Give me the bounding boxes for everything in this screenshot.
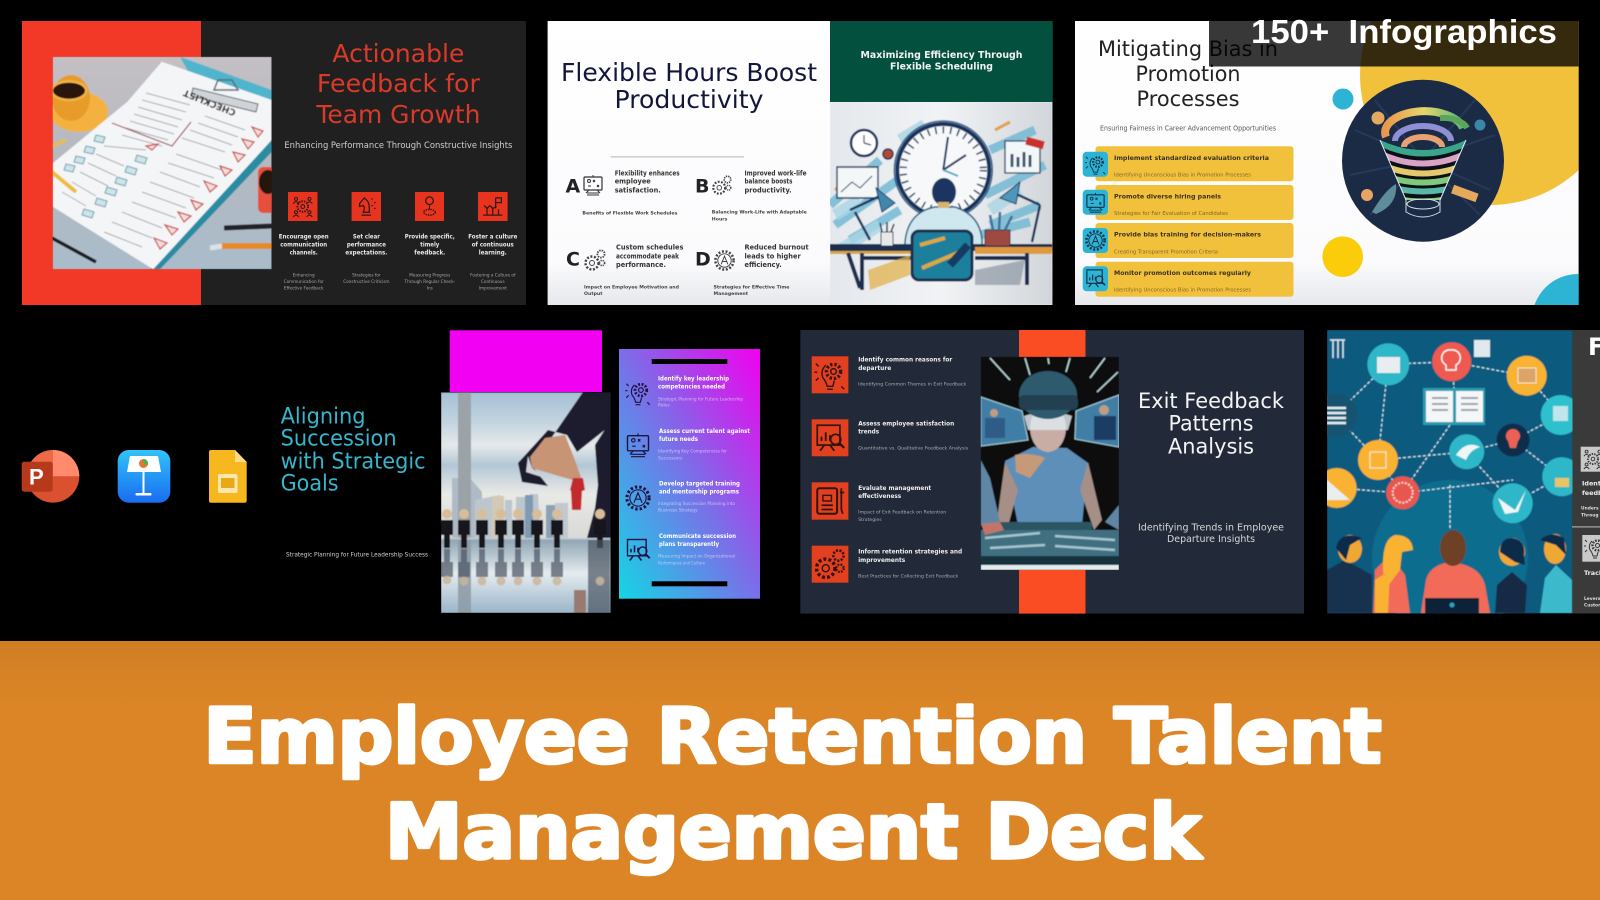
item C: accommodate peak (616, 253, 680, 261)
list subtext: Integrating Succession Planning into (658, 501, 735, 507)
exit item headings: Identify common reasons for (858, 357, 953, 364)
subtitle: Enhancing Performance Through Constructive Insights (284, 141, 513, 151)
list text (658, 376, 750, 548)
list text: Assess current talent against (659, 428, 750, 435)
text: four feedback actions: Encourage open (279, 235, 329, 241)
text: four feedback subtitles: Continuous (481, 279, 505, 284)
list text: and mentorship programs (659, 488, 739, 495)
heading: aligning succession: Aligning (281, 403, 366, 429)
item B (695, 169, 807, 222)
item D: efficiency. (744, 261, 782, 269)
subtitle: Ensuring Fairness in Career Advancement Opportunities (1100, 125, 1276, 133)
text: four feedback actions: performance (347, 243, 386, 249)
item B: productivity. (744, 186, 792, 194)
heading: flexible hours (561, 58, 817, 114)
image: leader picking figure (441, 392, 611, 613)
heading: actionable feedback (315, 39, 481, 129)
overlay banner: 150+ infographics: 150+ Infographics (1251, 13, 1557, 50)
item B: balance boosts (744, 178, 793, 186)
text: four feedback actions: timely (420, 243, 440, 249)
people around laptop (1327, 530, 1572, 614)
list item: monitor outcomes: Monitor promotion outcomes regularly (1114, 269, 1252, 277)
icon: flag team (478, 192, 508, 221)
list text: competencies needed (658, 384, 725, 391)
magenta block (450, 330, 602, 392)
item D: D (695, 249, 711, 271)
exit item subtext: Identifying Common Themes in Exit Feedback (858, 381, 967, 387)
exit item subtext: Impact of Exit Feedback on Retention (858, 509, 946, 515)
text: four feedback subtitles: Ins (427, 286, 433, 291)
heading: actionable feedback: Feedback for (317, 69, 481, 98)
list subtext: Identifying Key Competencies for (658, 449, 727, 455)
exit item headings: Inform retention strategies and (858, 549, 962, 556)
list text: plans transparently (659, 541, 719, 548)
heading: aligning succession: Succession (281, 426, 397, 452)
text: four feedback actions: learning. (479, 251, 507, 257)
panel: exit feedback slide (800, 330, 1304, 614)
list item: bias training: Creating Transparent Promotion Criteria (1114, 249, 1218, 255)
green header text: Maximizing Efficiency Through (860, 50, 1023, 61)
list item: monitor outcomes (1083, 262, 1294, 297)
image: clock and worker illustration (830, 102, 1052, 305)
green header text (860, 50, 1023, 73)
title: Employee Retention Talent (204, 692, 1382, 781)
clipped next-slide strip: Custor (1584, 603, 1600, 609)
list item: evaluation criteria: Implement standardized evaluation criteria (1114, 154, 1269, 162)
text: four feedback actions: feedback. (414, 251, 445, 257)
list subtext: Measuring Impact on Organizational (658, 554, 735, 560)
heading: exit feedback (1138, 389, 1285, 459)
text: four feedback subtitles: Effective Feedback (284, 286, 324, 291)
icon: Google Slides (209, 450, 247, 503)
text: four feedback actions: expectations. (345, 251, 387, 257)
decorative circles (1322, 21, 1579, 305)
text: four feedback subtitles: Constructive Criticism (343, 279, 389, 284)
list item: bias training (1083, 223, 1294, 258)
item A: A (566, 176, 580, 198)
title (204, 692, 1382, 876)
divider (611, 156, 744, 157)
exit item subtext: Strategies (858, 517, 882, 523)
banner: deck title (0, 641, 1600, 900)
heading: actionable feedback: Actionable (332, 39, 464, 68)
item B: B (695, 176, 709, 198)
heading: aligning succession (281, 403, 426, 497)
panel: flexible hours slide (548, 21, 1052, 305)
item D: Management (714, 291, 749, 297)
item C: Impact on Employee Motivation and (584, 284, 679, 290)
exit item subtext: Quantitative vs. Qualitative Feedback Analysis (858, 445, 969, 451)
icon: Keynote (118, 450, 170, 503)
item C: Output (584, 291, 603, 297)
exit item headings: Evaluate management (858, 485, 931, 492)
heading: flexible hours: Flexible Hours Boost (561, 58, 817, 87)
icon: PowerPoint: P (29, 464, 44, 490)
item A: Flexibility enhances (615, 169, 680, 177)
green header text: Flexible Scheduling (890, 62, 993, 73)
list item: hiring panels: Strategies for Fair Evaluation of Candidates (1114, 211, 1228, 217)
exit item headings (858, 357, 962, 564)
item A: employee (615, 178, 651, 186)
heading: aligning succession: with Strategic (281, 448, 426, 474)
item C: Custom schedules (616, 244, 683, 252)
icon: chess knight (352, 192, 381, 221)
panel: mitigating bias slide (1075, 19, 1579, 305)
item B: Improved work-life (744, 169, 807, 177)
list item: monitor outcomes: Identifying Unconscious Bias in Promotion Processes (1114, 288, 1251, 294)
title: Management Deck (385, 787, 1202, 876)
text: four feedback actions: of continuous (472, 243, 514, 249)
exit item subtext: Best Practices for Collecting Exit Feedback (858, 573, 959, 579)
list subtext: Strategic Planning for Future Leadership (658, 396, 743, 402)
text: four feedback subtitles: Strategies for (352, 272, 381, 277)
item D: leads to higher (744, 253, 801, 261)
item B: Balancing Work-Life with Adaptable (712, 210, 807, 216)
exit item headings: effectiveness (858, 493, 901, 500)
text: four feedback subtitles: Enhancing (293, 272, 315, 277)
exit item subtext (858, 381, 969, 579)
clipped next-slide strip: Throug (1581, 513, 1599, 519)
item A: Benefits of Flexible Work Schedules (582, 210, 678, 216)
item D: Strategies for Effective Time (714, 284, 790, 290)
item D: Reduced burnout (744, 244, 809, 252)
row of figurines (441, 520, 606, 548)
exit item headings: improvements (858, 557, 905, 564)
list subtext: Successors (658, 455, 683, 461)
heading: exit feedback: Patterns (1168, 412, 1254, 437)
clipped next-slide strip (1572, 333, 1600, 609)
text: four feedback actions: Foster a culture (468, 235, 517, 241)
heading: exit feedback: Exit Feedback (1138, 389, 1285, 414)
list text: future needs (659, 436, 698, 443)
item C: performance. (616, 261, 666, 269)
text: four feedback actions: Provide specific, (405, 235, 455, 241)
text: four feedback subtitles: Measuring Progress (409, 272, 450, 277)
icon: team target (288, 192, 318, 221)
text: four feedback subtitles: Fostering a Culture of (470, 272, 516, 277)
subtitle: exit feedback (1138, 523, 1284, 545)
text: four feedback actions: communication (280, 243, 327, 249)
list item: bias training: Provide bias training for decision-makers (1114, 231, 1261, 239)
item B: Hours (712, 216, 728, 222)
text: four feedback actions (279, 235, 517, 257)
text: four feedback actions: channels. (290, 251, 318, 257)
exit item headings: trends (858, 429, 879, 436)
panel: knowledge network illustration (1327, 330, 1600, 614)
image: rainbow funnel (1342, 80, 1504, 242)
panel: succession gradient list (619, 349, 760, 599)
image: checklist on clipboard (50, 57, 278, 269)
list item: evaluation criteria (1083, 146, 1294, 181)
text: four feedback subtitles: Through Regular Check- (404, 279, 456, 284)
item D (695, 244, 809, 297)
image: woman with holographic visor (981, 357, 1119, 570)
subtitle: strategic planning: Strategic Planning for Future Leadership Success (286, 551, 429, 559)
heading: exit feedback: Analysis (1168, 434, 1254, 459)
clipped next-slide strip: Unders (1581, 505, 1599, 511)
heading: aligning succession: Goals (281, 471, 339, 497)
exit item headings: Assess employee satisfaction (858, 420, 954, 427)
exit item headings: departure (858, 365, 891, 372)
panel: actionable feedback slide (22, 21, 526, 305)
text: upside-down checklist heading: CHECKLIST (182, 86, 238, 117)
subtitle: exit feedback: Identifying Trends in Employee (1138, 523, 1284, 534)
text: four feedback subtitles (284, 272, 516, 291)
heading: mitigating bias: Mitigating Bias in (1098, 37, 1278, 62)
text: four feedback subtitles: Improvement (479, 286, 507, 291)
list subtext: Performance and Culture (658, 560, 705, 566)
list text: Develop targeted training (659, 481, 740, 488)
list subtext (658, 396, 743, 566)
heading: actionable feedback: Team Growth (315, 100, 480, 129)
list subtext: Business Strategy (658, 507, 698, 513)
heading: flexible hours: Productivity (614, 85, 764, 114)
text: four feedback subtitles: Communication for (284, 279, 324, 284)
list text: Identify key leadership (658, 376, 730, 383)
item A: satisfaction. (615, 186, 661, 194)
exit items (812, 356, 969, 583)
subtitle: exit feedback: Departure Insights (1167, 534, 1255, 545)
overlay banner: 150+ infographics (1209, 13, 1579, 66)
heading: mitigating bias: Promotion (1136, 62, 1240, 87)
heading: mitigating bias (1098, 37, 1278, 112)
text: four feedback actions: Set clear (353, 235, 380, 241)
list item: hiring panels (1083, 185, 1294, 220)
list subtext: Roles (658, 402, 670, 408)
list item: hiring panels: Promote diverse hiring panels (1114, 192, 1221, 200)
item A (566, 169, 680, 216)
item C: C (566, 249, 580, 271)
item C (566, 244, 683, 297)
heading: mitigating bias: Processes (1136, 87, 1240, 112)
list item: evaluation criteria: Identifying Unconscious Bias in Promotion Processes (1114, 173, 1251, 179)
icon: PowerPoint (22, 450, 79, 503)
list text: Communicate succession (659, 533, 736, 540)
icon: idea (415, 192, 444, 221)
